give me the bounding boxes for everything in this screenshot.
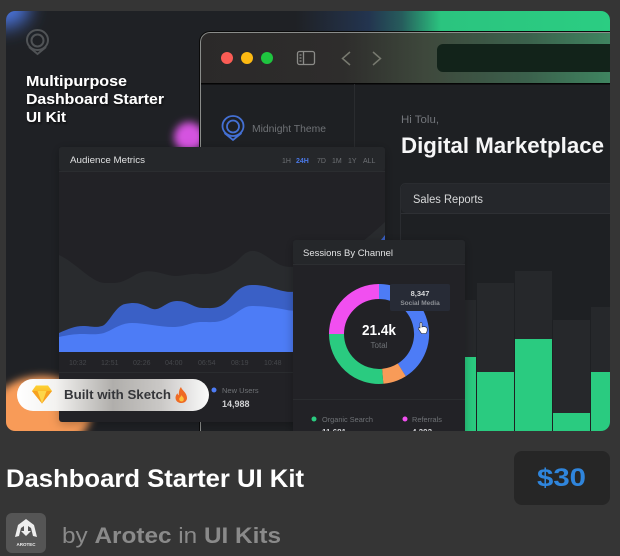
legend: organic search: 11,681 bbox=[322, 428, 347, 437]
area chart bbox=[59, 222, 385, 409]
icon: grey logo bbox=[27, 30, 48, 54]
time range tabs: 24H bbox=[296, 158, 309, 165]
panel title: Sessions By Channel bbox=[303, 248, 393, 259]
panel: sessions by channel bbox=[293, 240, 465, 440]
time axis labels: 10:32 bbox=[69, 360, 87, 367]
heading: kit title: Dashboard Starter bbox=[26, 91, 164, 108]
product title: Dashboard Starter UI Kit bbox=[6, 465, 305, 493]
author avatar bbox=[6, 513, 46, 553]
browser outer edge bbox=[200, 32, 610, 431]
heading: kit title: UI Kit bbox=[26, 109, 66, 126]
tooltip: Social Media bbox=[400, 300, 440, 307]
icon: sidebar toggle bbox=[298, 52, 314, 64]
time range tabs: 1Y bbox=[348, 158, 357, 165]
author line: by Arotec in UI Kits bbox=[62, 523, 281, 548]
bar chart bbox=[465, 339, 610, 431]
time axis labels: 10:48 bbox=[264, 360, 282, 367]
time axis labels: 12:51 bbox=[101, 360, 119, 367]
icon: hand cursor bbox=[418, 322, 427, 334]
donut total label: Total bbox=[371, 341, 388, 350]
icon: blue logo bbox=[222, 116, 244, 140]
panel title: Sales Reports bbox=[413, 194, 483, 206]
magenta glow bbox=[174, 122, 204, 152]
icon: back chevron bbox=[342, 52, 350, 65]
legend: referrals: Referrals bbox=[412, 415, 442, 424]
green top glow bbox=[310, 11, 610, 31]
address bar bbox=[437, 44, 620, 72]
time axis labels: 06:54 bbox=[198, 360, 216, 367]
badge label: Built with Sketch bbox=[64, 388, 171, 402]
browser window outline bbox=[200, 32, 610, 431]
panel title: Audience Metrics bbox=[70, 155, 145, 166]
time axis labels: 02:26 bbox=[133, 360, 151, 367]
blue corner glow bbox=[0, 0, 30, 28]
legend: organic search bbox=[312, 415, 373, 437]
time axis labels: 08:19 bbox=[231, 360, 249, 367]
greeting: Hi Tolu, bbox=[401, 114, 439, 126]
time range tabs: ALL bbox=[363, 158, 376, 165]
icon: sketch diamond bbox=[32, 386, 52, 404]
time range tabs bbox=[282, 158, 376, 163]
browser window bbox=[200, 32, 620, 444]
legend value: 14,988 bbox=[222, 399, 250, 409]
legend: referrals bbox=[402, 415, 442, 437]
browser toolbar bbox=[200, 32, 610, 84]
donut total value: 21.4k bbox=[362, 322, 397, 339]
time range tabs: 1M bbox=[332, 158, 342, 165]
donut chart bbox=[336, 291, 422, 376]
price tag: $30 bbox=[537, 464, 586, 492]
traffic light red bbox=[221, 52, 233, 64]
traffic light yellow bbox=[241, 52, 253, 64]
price tag bbox=[514, 451, 610, 505]
icon: forward chevron bbox=[373, 52, 380, 65]
heading: digital marketplace: Digital Marketplace bbox=[401, 133, 604, 158]
sidebar theme label: Midnight Theme bbox=[252, 124, 326, 135]
author avatar: AROTEC bbox=[16, 542, 36, 547]
tooltip bbox=[390, 284, 450, 311]
time axis labels: 04:00 bbox=[165, 360, 183, 367]
legend: organic search: Organic Search bbox=[322, 415, 373, 424]
time axis labels bbox=[70, 360, 282, 365]
panel: audience metrics bbox=[59, 147, 385, 422]
heading: kit title bbox=[26, 73, 164, 126]
legend dot bbox=[212, 388, 216, 392]
legend: referrals: 4,393 bbox=[412, 428, 433, 437]
tooltip: 8,347 bbox=[411, 289, 429, 298]
time range tabs: 1H bbox=[282, 158, 291, 165]
badge: built with sketch bbox=[17, 379, 209, 411]
legend label: New Users bbox=[222, 386, 259, 395]
traffic light green bbox=[261, 52, 273, 64]
panel: sales reports bbox=[400, 184, 620, 444]
orange corner glow bbox=[6, 370, 96, 431]
heading: kit title: Multipurpose bbox=[26, 73, 127, 90]
time range tabs: 7D bbox=[317, 158, 326, 165]
icon: flame bbox=[176, 387, 187, 403]
